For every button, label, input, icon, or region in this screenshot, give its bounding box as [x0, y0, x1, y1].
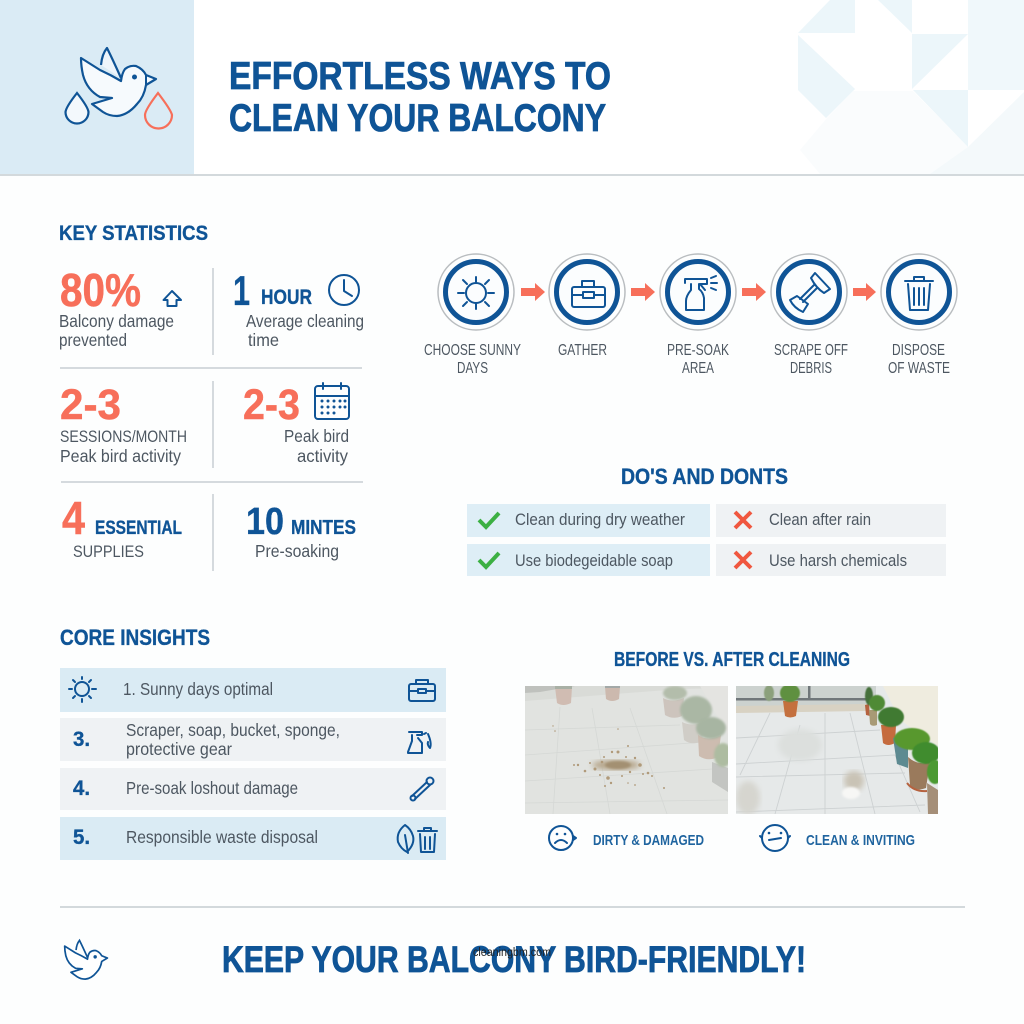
step 5: dispose of waste [881, 254, 957, 377]
watermark: cleaningbm.com [473, 947, 551, 959]
insight row 4: 4. [73, 777, 90, 800]
stat: 1 hour: HOUR [261, 286, 312, 309]
title: CLEAN YOUR BALCONY [229, 97, 606, 140]
insight row 4: Pre-soak loshout damage [126, 778, 298, 798]
don't: use harsh chemicals [716, 544, 946, 576]
header banner [0, 0, 1024, 176]
step 2: gather [549, 254, 625, 359]
don't: use harsh chemicals: Use harsh chemicals [769, 551, 907, 570]
panel: do's and don'ts [467, 464, 946, 576]
step 5: dispose of waste: DISPOSE [892, 342, 945, 359]
step 4: scrape off debris: DEBRIS [790, 360, 832, 377]
photo: after, clean balcony [736, 684, 943, 815]
do: use biodegradable soap: Use biodegeidable soap [515, 551, 673, 570]
insight row 3 [60, 718, 446, 761]
panel: core insights [60, 625, 446, 860]
stat: peak bird activity: Peak bird [284, 426, 349, 446]
step 5: dispose of waste: OF WASTE [888, 360, 950, 377]
heading: core insights: CORE INSIGHTS [60, 625, 210, 650]
stat: 1 hour: time [248, 330, 279, 350]
insight row 4 [60, 768, 446, 810]
stat: peak bird activity: activity [297, 446, 348, 466]
stat: 80% [59, 264, 181, 350]
stat: 4 essential supplies [62, 492, 182, 561]
icon: bird and water drops [66, 48, 172, 128]
panel: key statistics [59, 221, 364, 571]
stat: 80%: 80% [60, 264, 141, 316]
step 4: scrape off debris: SCRAPE OFF [774, 342, 848, 359]
don't: clean after rain [716, 504, 946, 537]
stat: peak bird activity [243, 381, 349, 466]
stat: sessions per month: 2-3 [60, 381, 121, 429]
insight row 3: 3. [73, 728, 90, 751]
insight row 3: Scraper, soap, bucket, sponge, [126, 720, 340, 740]
step 3: pre-soak area: PRE-SOAK [667, 342, 730, 359]
insight row 1: 1. Sunny days optimal [123, 679, 273, 699]
photo: before, dirty balcony [525, 686, 732, 814]
icon: footer bird [65, 940, 107, 979]
process flow: five steps [424, 254, 957, 377]
stat: 10 minutes: MINTES [291, 517, 356, 539]
stat: sessions per month: SESSIONS/MONTH [60, 427, 187, 446]
title [229, 55, 611, 140]
step 3: pre-soak area [660, 254, 736, 377]
do: use biodegradable soap [467, 544, 710, 576]
stat: 1 hour: 1 [233, 267, 250, 314]
stat: 4 essential supplies: SUPPLIES [73, 542, 144, 561]
insight row 3: protective gear [126, 739, 232, 759]
step 1: choose sunny days: DAYS [457, 360, 488, 377]
call to action: KEEP YOUR BALCONY BIRD-FRIENDLY! [222, 939, 806, 980]
label: clean and inviting: CLEAN & INVITING [806, 832, 915, 849]
heading: key statistics: KEY STATISTICS [59, 221, 208, 245]
do: clean during dry weather: Clean during dry weather [515, 510, 685, 529]
step 2: gather: GATHER [558, 342, 607, 359]
title: EFFORTLESS WAYS TO [229, 55, 611, 98]
step 1: choose sunny days: CHOOSE SUNNY [424, 342, 521, 359]
heading: before vs after cleaning: BEFORE VS. AFTER CLEANING [614, 649, 850, 671]
stat: peak bird activity: 2-3 [243, 381, 300, 429]
footer banner [65, 939, 806, 980]
panel: before vs after [525, 649, 943, 851]
stat: 80%: prevented [59, 330, 127, 350]
stat: 1 hour [233, 267, 364, 350]
stat: sessions per month: Peak bird activity [60, 446, 181, 466]
heading: do's and don'ts: DO'S AND DONTS [621, 464, 788, 489]
stat: 10 minutes: Pre-soaking [255, 541, 339, 561]
insight row 5: Responsible waste disposal [126, 827, 318, 847]
arrow [521, 283, 545, 301]
stat: 10 minutes [246, 501, 356, 561]
insight row 5 [60, 817, 446, 860]
stat: 80%: Balcony damage [59, 311, 174, 331]
stat: 1 hour: Average cleaning [246, 311, 364, 331]
arrow [631, 283, 655, 301]
stat: 4 essential supplies: ESSENTIAL [95, 518, 182, 539]
label: dirty and damaged: DIRTY & DAMAGED [593, 832, 704, 849]
step 4: scrape off debris [771, 254, 848, 377]
step 3: pre-soak area: AREA [682, 360, 714, 377]
stat: sessions per month [60, 381, 187, 466]
label: dirty and damaged [549, 826, 704, 850]
stat: 4 essential supplies: 4 [62, 492, 85, 544]
don't: clean after rain: Clean after rain [769, 510, 871, 529]
step 1: choose sunny days [424, 254, 521, 377]
insight row 1 [60, 668, 446, 712]
label: clean and inviting [760, 825, 915, 851]
arrow [742, 283, 766, 301]
do: clean during dry weather [467, 504, 710, 537]
stat: 10 minutes: 10 [246, 501, 284, 543]
arrow [853, 283, 876, 301]
insight row 5: 5. [73, 826, 90, 849]
